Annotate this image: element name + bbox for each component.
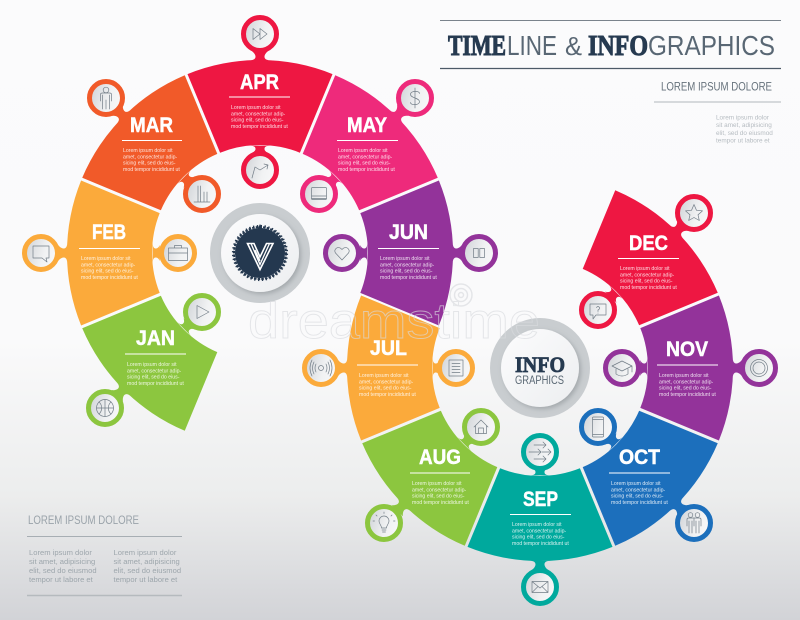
segment: APR: sicing elit, sed do eius- bbox=[231, 118, 284, 124]
segment: MAY: amet, consectetur adip- bbox=[338, 154, 392, 160]
segment: MAY: sicing elit, sed do eius- bbox=[338, 161, 391, 167]
segment: JAN bbox=[66, 273, 240, 447]
segment: FEB: amet, consectetur adip- bbox=[81, 262, 135, 268]
segment: DEC: sicing elit, sed do eius- bbox=[620, 279, 673, 285]
segment: APR bbox=[188, 18, 332, 186]
text block: bottom left note: sit amet, adipisicing bbox=[114, 557, 180, 566]
text block: top right note: elit, sed do eiusmod bbox=[716, 130, 773, 137]
segment: APR: amet, consectetur adip- bbox=[231, 111, 285, 117]
text block: bottom left note: elit, sed do eiusmod bbox=[114, 566, 181, 575]
segment: MAR: amet, consectetur adip- bbox=[123, 154, 177, 160]
icon: person bbox=[90, 82, 122, 114]
icon: concentric circles bbox=[742, 352, 776, 384]
segment: FEB: Lorem ipsum dolor sit bbox=[81, 256, 131, 262]
segment: JAN: sicing elit, sed do eius- bbox=[127, 375, 180, 381]
segment: DEC: DEC bbox=[629, 232, 668, 255]
icon: fast forward bbox=[244, 18, 276, 50]
segment: MAR: mod tempor incididunt ut bbox=[123, 167, 180, 173]
segment: SEP: SEP bbox=[523, 488, 558, 511]
segment: APR: APR bbox=[240, 71, 279, 94]
segment: JAN: Lorem ipsum dolor sit bbox=[127, 362, 177, 368]
segment: DEC: Lorem ipsum dolor sit bbox=[620, 266, 670, 272]
icon: envelope bbox=[524, 570, 556, 604]
segment: JUL: JUL bbox=[370, 337, 407, 360]
segment: DEC bbox=[560, 174, 734, 348]
center medallion: logo bbox=[210, 203, 310, 303]
segment: MAY: MAY bbox=[347, 114, 387, 137]
segment: SEP: mod tempor incididunt ut bbox=[512, 541, 569, 547]
segment: OCT: Lorem ipsum dolor sit bbox=[611, 481, 661, 487]
segment: DEC: mod tempor incididunt ut bbox=[620, 285, 677, 291]
header: title block bbox=[440, 20, 781, 68]
segment: JUN: sicing elit, sed do eius- bbox=[380, 269, 433, 275]
text block: bottom left note: sit amet, adipisicing bbox=[29, 557, 95, 566]
segment: JUL: amet, consectetur adip- bbox=[359, 379, 413, 385]
center medallion: info graphics: INFO bbox=[515, 352, 565, 377]
header: title block: INFO bbox=[588, 31, 648, 62]
icon: columns bbox=[462, 236, 496, 270]
segment: MAY bbox=[280, 59, 454, 233]
segment: SEP bbox=[468, 436, 612, 604]
icon: light bulb bbox=[368, 506, 400, 540]
segment: AUG bbox=[346, 388, 520, 562]
segment: NOV: sicing elit, sed do eius- bbox=[659, 386, 712, 392]
segment: JUN: mod tempor incididunt ut bbox=[380, 275, 437, 281]
icon: heart bbox=[326, 236, 358, 270]
segment: JUL: Lorem ipsum dolor sit bbox=[359, 373, 409, 379]
segment: OCT: sicing elit, sed do eius- bbox=[611, 494, 664, 500]
segment: FEB bbox=[24, 180, 194, 326]
segment: JAN: amet, consectetur adip- bbox=[127, 368, 181, 374]
icon: speech bubble bbox=[24, 236, 58, 270]
segment: NOV bbox=[606, 296, 776, 440]
segment: NOV: amet, consectetur adip- bbox=[659, 379, 713, 385]
segment: OCT: mod tempor incididunt ut bbox=[611, 500, 668, 506]
segment: MAR: sicing elit, sed do eius- bbox=[123, 161, 176, 167]
icon: graduation cap bbox=[606, 352, 638, 384]
segment: JUN: Lorem ipsum dolor sit bbox=[380, 256, 430, 262]
icon: smartphone bbox=[582, 410, 614, 444]
segment: JUL bbox=[304, 296, 472, 440]
header: title block: TIME bbox=[448, 31, 506, 62]
segment: JUL: sicing elit, sed do eius- bbox=[359, 386, 412, 392]
icon: basketball bbox=[88, 392, 122, 424]
icon: dollar bbox=[398, 82, 432, 114]
segment: AUG: AUG bbox=[419, 446, 461, 469]
segment: JAN: JAN bbox=[136, 327, 175, 350]
icon: house bbox=[464, 410, 498, 444]
segment: APR: Lorem ipsum dolor sit bbox=[231, 105, 281, 111]
icon: laptop bbox=[302, 178, 336, 210]
watermark: dreamstime bbox=[248, 293, 540, 349]
header: title block: LINE bbox=[507, 30, 557, 61]
icon: question bubble bbox=[582, 294, 614, 326]
text block: top right note: Lorem ipsum dolor bbox=[716, 114, 770, 122]
segment: AUG: Lorem ipsum dolor sit bbox=[412, 481, 462, 487]
segment: OCT bbox=[560, 388, 734, 562]
header: title block: GRAPHICS bbox=[648, 30, 775, 61]
segment: FEB: FEB bbox=[92, 221, 126, 244]
segment: DEC: amet, consectetur adip- bbox=[620, 272, 674, 278]
text block: bottom left note: LOREM IPSUM DOLORE bbox=[28, 513, 139, 527]
icon: signal bbox=[304, 352, 338, 384]
segment: NOV: NOV bbox=[666, 338, 708, 361]
icon: trend line bbox=[244, 154, 276, 186]
segment: OCT: amet, consectetur adip- bbox=[611, 487, 665, 493]
segment: SEP: Lorem ipsum dolor sit bbox=[512, 522, 562, 528]
icon: document bbox=[440, 352, 472, 384]
text block: top right note: LOREM IPSUM DOLORE bbox=[661, 80, 772, 94]
segment: FEB: mod tempor incididunt ut bbox=[81, 275, 138, 281]
segment: JUN bbox=[326, 180, 496, 326]
icon: play bbox=[186, 296, 218, 328]
text block: bottom left note bbox=[27, 513, 182, 596]
icon: star bbox=[678, 196, 710, 230]
segment: JAN: mod tempor incididunt ut bbox=[127, 381, 184, 387]
text block: top right note: tempor ut labore et bbox=[716, 138, 770, 145]
icon: spiky V badge bbox=[233, 224, 287, 280]
segment: NOV: mod tempor incididunt ut bbox=[659, 392, 716, 398]
segment: SEP: amet, consectetur adip- bbox=[512, 528, 566, 534]
header: title block: & bbox=[565, 31, 582, 61]
center medallion: info graphics bbox=[490, 318, 590, 418]
icon: arrows bbox=[524, 436, 556, 468]
segment: APR: mod tempor incididunt ut bbox=[231, 124, 288, 130]
text block: bottom left note: elit, sed do eiusmod bbox=[29, 566, 97, 575]
center medallion: info graphics: GRAPHICS bbox=[515, 375, 564, 387]
segment: MAY: mod tempor incididunt ut bbox=[338, 167, 395, 173]
text block: bottom left note: Lorem ipsum dolor bbox=[114, 548, 177, 557]
text block: bottom left note: tempor ut labore et bbox=[114, 575, 178, 584]
text block: top right note: sit amet, adipisicing bbox=[716, 122, 772, 129]
text block: bottom left note: tempor ut labore et bbox=[29, 575, 94, 584]
segment: MAR bbox=[66, 59, 240, 233]
text block: bottom left note: Lorem ipsum dolor bbox=[29, 548, 92, 557]
segment: MAY: Lorem ipsum dolor sit bbox=[338, 148, 388, 154]
icon: bar chart bbox=[186, 178, 218, 210]
segment: MAR: Lorem ipsum dolor sit bbox=[123, 148, 173, 154]
segment: OCT: OCT bbox=[619, 446, 660, 469]
segment: AUG: mod tempor incididunt ut bbox=[412, 500, 469, 506]
segment: MAR: MAR bbox=[130, 114, 173, 137]
segment: NOV: Lorem ipsum dolor sit bbox=[659, 373, 709, 379]
icon: two people bbox=[678, 506, 710, 540]
segment: AUG: sicing elit, sed do eius- bbox=[412, 494, 465, 500]
segment: JUL: mod tempor incididunt ut bbox=[359, 392, 416, 398]
icon: briefcase bbox=[162, 236, 194, 270]
segment: JUN: amet, consectetur adip- bbox=[380, 262, 434, 268]
segment: FEB: sicing elit, sed do eius- bbox=[81, 269, 134, 275]
segment: JUN: JUN bbox=[389, 221, 428, 244]
segment: SEP: sicing elit, sed do eius- bbox=[512, 535, 565, 541]
segment: AUG: amet, consectetur adip- bbox=[412, 487, 466, 493]
text block: top right note bbox=[654, 80, 781, 145]
